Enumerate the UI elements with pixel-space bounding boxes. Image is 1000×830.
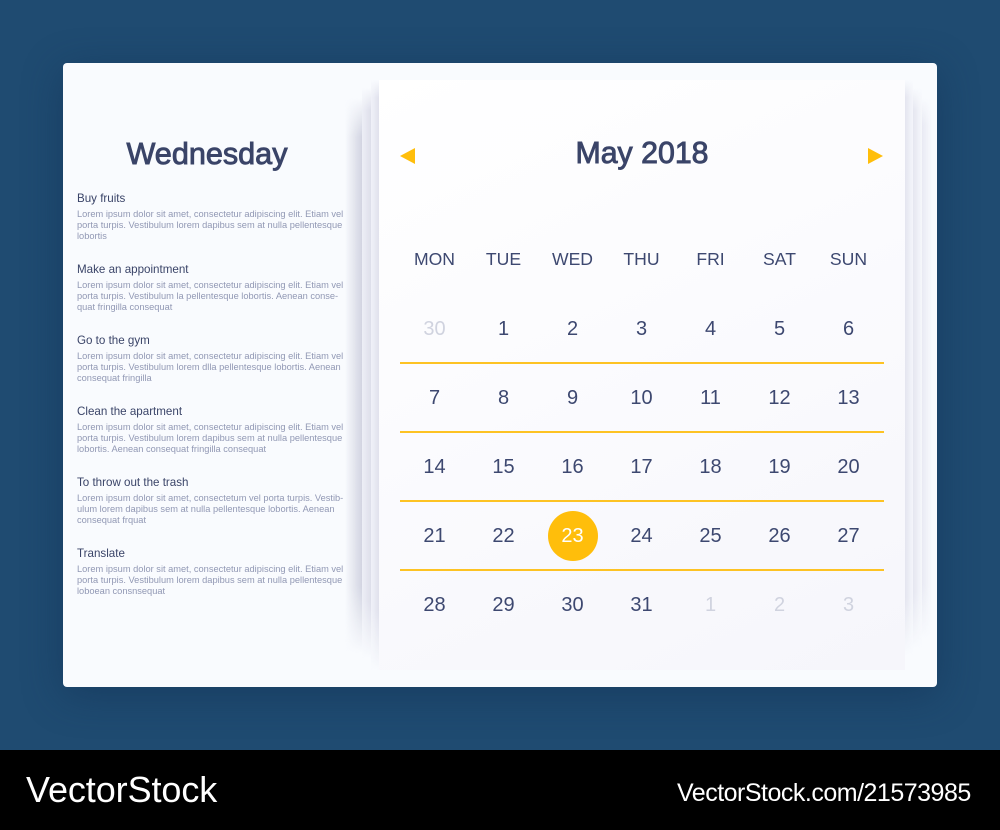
task: Buy fruits <box>77 192 343 241</box>
task: To throw out the trash: ulum lorem dapibus sem at nulla pellentesque lobortis. Aenean <box>77 504 335 514</box>
week row 5: 3 <box>843 594 854 616</box>
week row 3: 15 <box>492 456 515 478</box>
row divider 1 <box>400 362 884 364</box>
week row 2: 13 <box>837 387 860 409</box>
row divider 3 <box>400 500 884 502</box>
week row 2: 9 <box>567 387 578 409</box>
task: Translate: loboean consnsequat <box>77 586 165 596</box>
task: Make an appointment: porta turpis. Vestibulum la pellentesque lobortis. Aenean conse- <box>77 291 338 301</box>
task: Go to the gym: porta turpis. Vestibulum lorem dlla pellentesque lobortis. Aenean <box>77 362 341 372</box>
task: To throw out the trash <box>77 476 343 525</box>
footer bar <box>0 750 1000 830</box>
task: Make an appointment: Make an appointment <box>77 263 188 276</box>
task: Make an appointment <box>77 263 343 312</box>
weekday header: SAT <box>763 249 796 269</box>
row divider 4 <box>400 569 884 571</box>
task: Clean the apartment: porta turpis. Vestibulum lorem dapibus sem at nulla pellentesque <box>77 433 342 443</box>
week row 4: 21 <box>423 525 446 547</box>
week row 5: 1 <box>705 594 716 616</box>
task: To throw out the trash: To throw out the trash <box>77 476 188 489</box>
week row 1: 1 <box>498 318 509 340</box>
week row 2 <box>429 387 860 409</box>
weekday header: SUN <box>830 249 867 269</box>
week row 2: 7 <box>429 387 440 409</box>
task: Buy fruits: Lorem ipsum dolor sit amet, consectetur adipiscing elit. Etiam vel <box>77 209 343 219</box>
week row 4: 23 <box>561 525 584 547</box>
week row 1: 2 <box>567 318 578 340</box>
task: Go to the gym: Lorem ipsum dolor sit amet, consectetur adipiscing elit. Etiam vel <box>77 351 343 361</box>
weekday header: FRI <box>696 249 725 269</box>
week row 1: 3 <box>636 318 647 340</box>
weekday header: THU <box>623 249 660 269</box>
heading: May 2018: May 2018 <box>575 137 709 170</box>
week row 5: 29 <box>492 594 515 616</box>
week row 5 <box>423 594 854 616</box>
task: Buy fruits: Buy fruits <box>77 192 125 205</box>
week row 1: 6 <box>843 318 854 340</box>
week row 3: 18 <box>699 456 722 478</box>
week row 1: 4 <box>705 318 716 340</box>
week row 5: 28 <box>423 594 446 616</box>
task: Make an appointment: Lorem ipsum dolor sit amet, consectetur adipiscing elit. Etiam vel <box>77 280 343 290</box>
week row 4: 22 <box>492 525 515 547</box>
task: Buy fruits: lobortis <box>77 231 107 241</box>
week row 3: 16 <box>561 456 584 478</box>
task: Translate: porta turpis. Vestibulum lorem dapibus sem at nulla pellentesque <box>77 575 342 585</box>
page stack: left shadows <box>348 86 379 652</box>
weekday header <box>414 249 867 269</box>
week row 5: 30 <box>561 594 584 616</box>
week row 4 <box>423 525 860 547</box>
panel: calendar page <box>379 80 905 670</box>
task: To throw out the trash: consequat frquat <box>77 515 146 525</box>
week row 2: 12 <box>768 387 791 409</box>
week row 3: 20 <box>837 456 860 478</box>
week row 3: 14 <box>423 456 446 478</box>
panel: calendar card <box>63 63 937 687</box>
week row 2: 10 <box>630 387 653 409</box>
week row 5: 2 <box>774 594 785 616</box>
task: Translate <box>77 547 343 596</box>
page stack: right shadows <box>905 86 928 634</box>
week row 3: 17 <box>630 456 653 478</box>
weekday header: TUE <box>486 249 521 269</box>
icon: next month arrow <box>868 148 883 164</box>
week row 1 <box>423 318 854 340</box>
task: Make an appointment: quat fringilla consequat <box>77 302 172 312</box>
icon: previous month arrow <box>400 148 415 164</box>
task: Buy fruits: porta turpis. Vestibulum lorem dapibus sem at nulla pellentesque <box>77 220 342 230</box>
icon: selected day circle <box>548 510 598 560</box>
week row 1: 30 <box>423 318 446 340</box>
task: Go to the gym: consequat fringilla <box>77 373 152 383</box>
footer url: VectorStock.com/21573985 <box>677 779 971 807</box>
week row 5: 31 <box>630 594 653 616</box>
week row 3: 19 <box>768 456 791 478</box>
heading: Wednesday: Wednesday <box>126 137 288 171</box>
task: Go to the gym <box>77 334 343 383</box>
week row 3 <box>423 456 860 478</box>
task: Clean the apartment <box>77 405 343 454</box>
task: Translate: Lorem ipsum dolor sit amet, consectetur adipiscing elit. Etiam vel <box>77 564 343 574</box>
week row 4: 27 <box>837 525 860 547</box>
task: Clean the apartment: lobortis. Aenean consequat fringilla consequat <box>77 444 266 454</box>
week row 4: 24 <box>630 525 653 547</box>
week row 4: 26 <box>768 525 791 547</box>
task: Translate: Translate <box>77 547 125 560</box>
row divider 2 <box>400 431 884 433</box>
week row 2: 11 <box>700 387 721 409</box>
task: To throw out the trash: Lorem ipsum dolor sit amet, consectetum vel porta turpis. Vestib- <box>77 493 343 503</box>
task: Clean the apartment: Lorem ipsum dolor sit amet, consectetur adipiscing elit. Etiam vel <box>77 422 343 432</box>
footer brand: VectorStock <box>26 769 217 810</box>
task: Clean the apartment: Clean the apartment <box>77 405 182 418</box>
week row 1: 5 <box>774 318 785 340</box>
week row 2: 8 <box>498 387 509 409</box>
weekday header: WED <box>552 249 593 269</box>
weekday header: MON <box>414 249 455 269</box>
task: Go to the gym: Go to the gym <box>77 334 150 347</box>
week row 4: 25 <box>699 525 722 547</box>
